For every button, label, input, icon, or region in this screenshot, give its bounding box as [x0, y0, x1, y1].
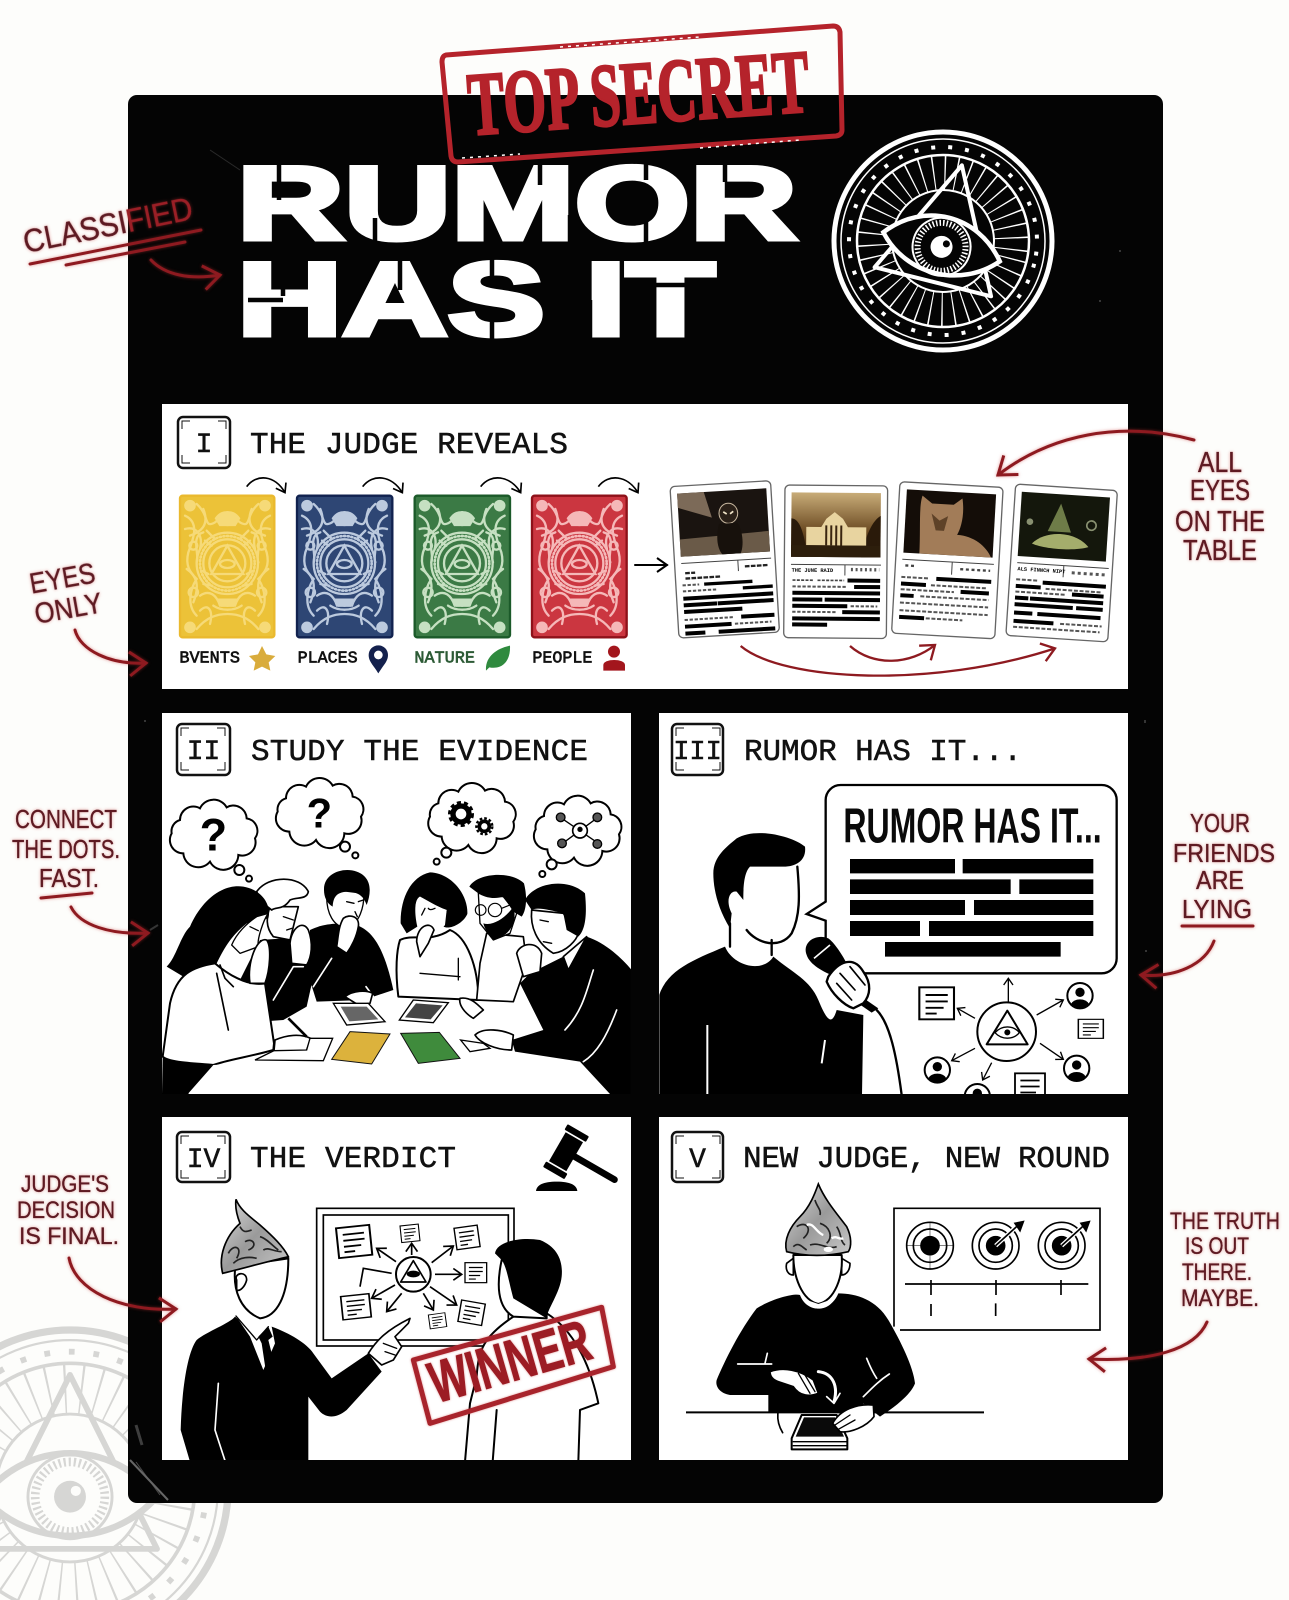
thought bubble: gears — [428, 783, 516, 865]
icon: person — [603, 646, 625, 671]
thought bubble: question — [170, 800, 257, 882]
card: places — [297, 496, 392, 637]
annotation: judge's decision is final: IS FINAL. — [19, 1223, 119, 1250]
flip arrows — [247, 478, 638, 493]
thought bubble: question: ? — [200, 810, 227, 861]
scene: judge picks winner — [181, 1124, 630, 1462]
title: Rumor Has It — [237, 146, 797, 358]
annotation: the truth is out there maybe: IS OUT — [1185, 1233, 1249, 1260]
black poster panel — [128, 95, 1163, 1503]
annotation: all eyes on the table: EYES — [1190, 475, 1250, 507]
rumor card 4 — [1006, 484, 1117, 642]
step V number and heading: NEW JUDGE, NEW ROUND — [743, 1142, 1110, 1177]
annotation: eyes only: ONLY — [32, 587, 105, 631]
icon: map pin — [369, 645, 388, 673]
label: places: PLACES — [298, 650, 358, 669]
step V number and heading: V — [689, 1145, 706, 1176]
label: events: BVENTS — [179, 650, 240, 669]
panel V: new judge, new round — [659, 1117, 1128, 1460]
eye seal emblem — [811, 109, 1075, 373]
panel II: study the evidence — [162, 713, 632, 1094]
annotation: all eyes on the table: TABLE — [1183, 535, 1257, 567]
step III number and heading: III — [673, 738, 722, 768]
annotation: the truth is out there maybe: MAYBE. — [1181, 1285, 1259, 1312]
rumor card 4: ALS FINNCH NIPT — [1017, 566, 1066, 575]
flow arrows under cards — [741, 645, 1055, 676]
network diagram — [919, 978, 1103, 1109]
annotation: your friends are lying: LYING — [1182, 894, 1252, 924]
step II number and heading — [177, 724, 588, 775]
annotation: all eyes on the table: ALL — [1198, 447, 1242, 479]
annotation: classified: CLASSIFIED — [20, 190, 196, 260]
rumor card 2 — [784, 485, 888, 639]
thought bubble: question — [276, 778, 363, 858]
label: nature: NATURE — [414, 650, 475, 669]
judge in foil hat — [181, 1199, 410, 1462]
step III number and heading — [672, 724, 1022, 775]
label: people: PEOPLE — [532, 650, 592, 669]
title: Rumor Has It: HAS IT — [237, 242, 715, 358]
icon: gavel — [536, 1124, 618, 1191]
background watermark: eye seal — [0, 1330, 228, 1600]
annotation: eyes only: EYES — [27, 558, 98, 601]
card: people — [532, 496, 627, 637]
stamp: winner — [413, 1307, 613, 1423]
blonde man — [240, 878, 312, 1021]
arrow to rumor cards — [635, 564, 667, 566]
thought bubble: network — [534, 796, 621, 877]
evidence board — [317, 1208, 514, 1346]
step V number and heading — [672, 1132, 1110, 1182]
annotation: your friends are lying: ARE — [1196, 865, 1244, 895]
annotation: connect the dots fast: FAST. — [39, 863, 99, 893]
annotation: eyes only — [27, 558, 146, 663]
annotation: judge's decision is final — [17, 1171, 176, 1309]
rumor card 3 — [892, 482, 1003, 639]
scratches on poster panel — [130, 150, 1146, 1500]
table — [188, 1064, 218, 1094]
step IV number and heading — [177, 1132, 456, 1182]
scene: group around table — [162, 778, 632, 1094]
panel IV: the verdict — [162, 1117, 631, 1462]
category cards — [179, 478, 638, 673]
annotation: all eyes on the table: ON THE — [1175, 506, 1265, 538]
stamp: Top Secret: TOP SECRET — [464, 32, 813, 155]
annotation: the truth is out there maybe — [1089, 1208, 1280, 1359]
annotation: judge's decision is final: DECISION — [17, 1197, 115, 1224]
step I number and heading: I — [196, 430, 212, 461]
title: Rumor Has It: RUMOR — [237, 146, 797, 262]
stamp: winner: WINNER — [422, 1308, 598, 1416]
bearded man with glasses — [469, 875, 527, 1002]
step IV number and heading: IV — [187, 1145, 220, 1176]
speech bubble — [807, 785, 1117, 973]
step II number and heading: STUDY THE EVIDENCE — [251, 735, 588, 770]
rumor card 1 — [670, 481, 779, 638]
annotation: your friends are lying: YOUR — [1190, 808, 1250, 838]
icon: star — [249, 646, 275, 671]
annotation: connect the dots fast: CONNECT — [15, 804, 117, 834]
cards on table — [255, 1000, 490, 1064]
woman in front left — [162, 886, 274, 1094]
card: events — [180, 496, 274, 637]
rumor cards — [670, 481, 1117, 676]
step I number and heading — [178, 417, 568, 468]
deck of cards — [778, 1398, 874, 1449]
annotation: your friends are lying: FRIENDS — [1173, 838, 1275, 868]
annotation: your friends are lying — [1141, 808, 1275, 975]
scene: new judge shuffling — [686, 1184, 1100, 1449]
step I number and heading: THE JUDGE REVEALS — [250, 428, 568, 463]
step III number and heading: RUMOR HAS IT... — [744, 735, 1022, 770]
annotation: the truth is out there maybe: THERE. — [1182, 1259, 1252, 1286]
player seen from behind — [465, 1239, 598, 1462]
scene: speaker with microphone — [659, 785, 1117, 1109]
icon: leaf — [486, 646, 510, 671]
card: nature — [415, 496, 510, 637]
annotation: connect the dots fast: THE DOTS. — [12, 834, 120, 864]
annotation: all eyes on the table — [998, 431, 1265, 567]
judge in foil hat — [716, 1184, 915, 1417]
thought bubble: question: ? — [307, 789, 332, 836]
speaker — [659, 833, 902, 1095]
speech bubble: RUMOR HAS IT... — [843, 799, 1102, 853]
woman in white blouse at centre — [397, 872, 478, 1000]
hands and pencil — [274, 991, 483, 1052]
annotation: connect the dots fast — [12, 804, 148, 933]
stamp: Top Secret — [442, 26, 842, 162]
step IV number and heading: THE VERDICT — [250, 1142, 456, 1177]
scoreboard — [894, 1208, 1100, 1330]
man with dark sweater — [307, 870, 393, 1002]
rumor card 2: THE JUNE RAID — [792, 568, 833, 574]
table line — [686, 1409, 984, 1415]
panel III: rumor has it — [659, 713, 1128, 1109]
step II number and heading: II — [187, 737, 220, 768]
man in dark suit right — [475, 884, 632, 1094]
annotation: judge's decision is final: JUDGE'S — [21, 1171, 109, 1198]
panel I: the judge reveals — [162, 404, 1128, 689]
